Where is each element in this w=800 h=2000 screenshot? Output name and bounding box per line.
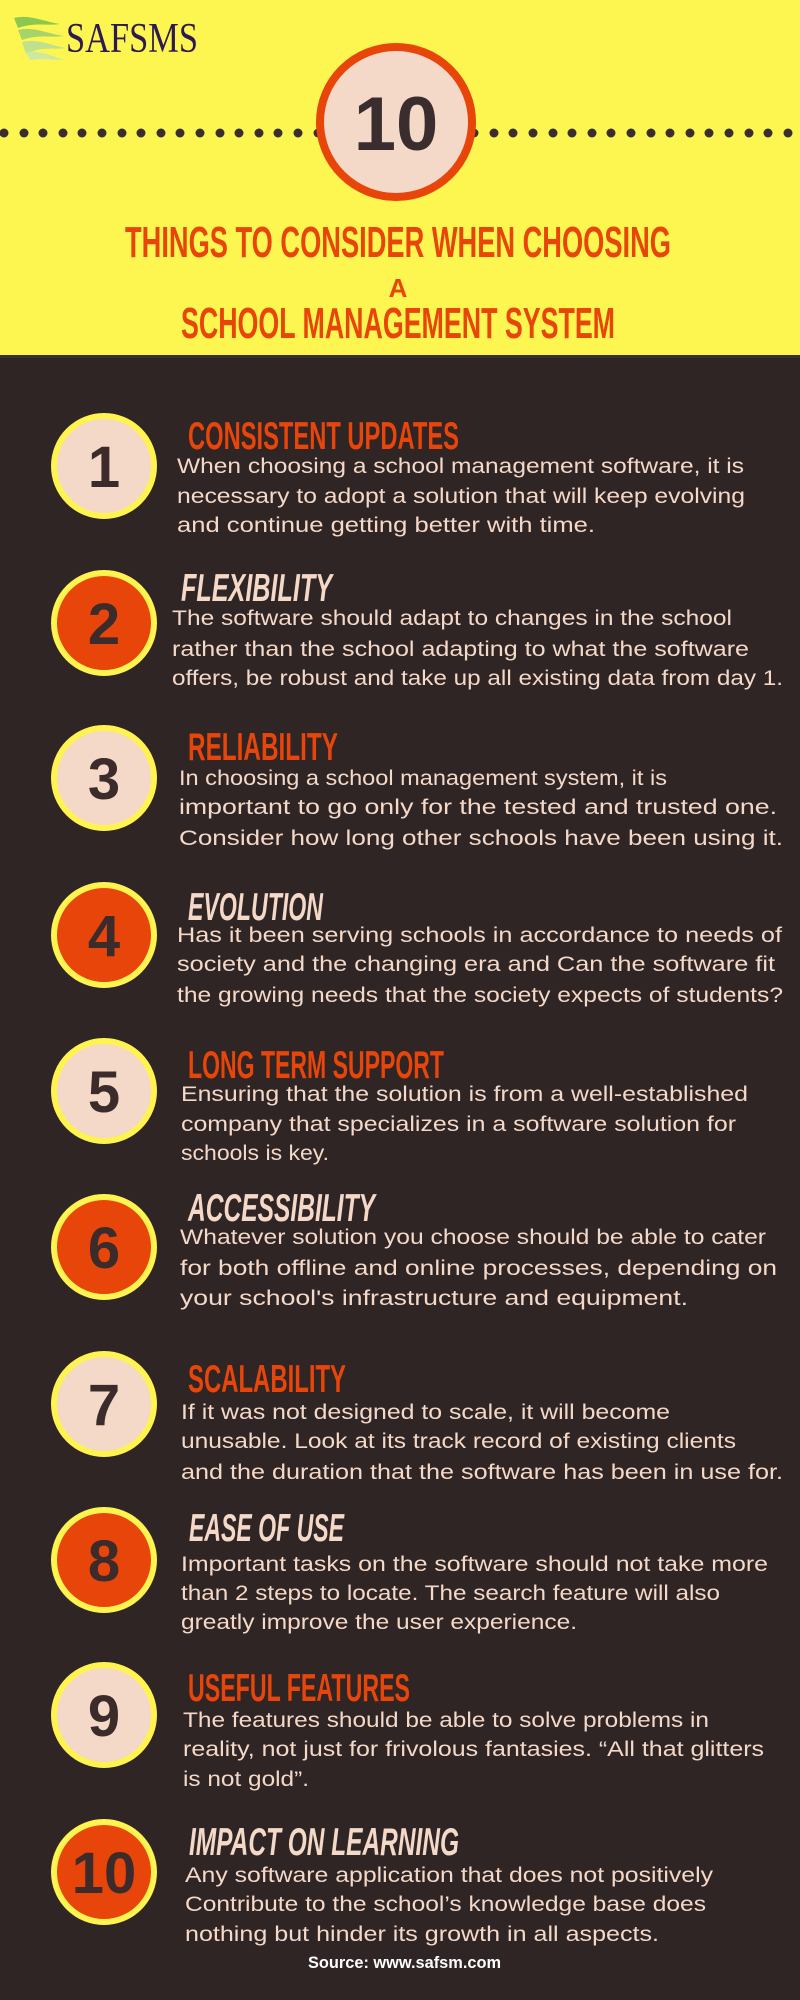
- big number badge: [320, 47, 472, 197]
- item 8: Important tasks on the software should not take more: [181, 1553, 768, 1576]
- item 3: [54, 726, 783, 850]
- item 10: Any software application that does not positively: [185, 1864, 714, 1887]
- item 9: reality, not just for frivolous fantasies. “All that glitters: [183, 1738, 764, 1761]
- item 6: ACCESSIBILITY: [187, 1187, 377, 1230]
- item 7: 7: [88, 1373, 120, 1438]
- item 1: CONSISTENT UPDATES: [188, 415, 459, 458]
- item 1: [54, 415, 745, 537]
- item 10: [54, 1821, 714, 1946]
- logo: SAFSMS: [66, 16, 198, 62]
- item 4: society and the changing era and Can the software fit: [177, 953, 775, 976]
- big number badge: 10: [354, 82, 438, 167]
- item 2: rather than the school adapting to what the software: [172, 638, 749, 661]
- item 5: LONG TERM SUPPORT: [188, 1044, 444, 1087]
- item 2: [54, 567, 783, 690]
- item 4: [54, 885, 783, 1007]
- title: A: [389, 273, 408, 303]
- item 4: Has it been serving schools in accordance to needs of: [177, 924, 782, 947]
- item 10: Contribute to the school’s knowledge base does: [185, 1893, 706, 1916]
- item 9: The features should be able to solve problems in: [183, 1709, 709, 1732]
- item 5: Ensuring that the solution is from a well-established: [181, 1083, 748, 1106]
- item 2: 2: [88, 592, 120, 657]
- item 10: IMPACT ON LEARNING: [189, 1821, 459, 1864]
- item 9: USEFUL FEATURES: [188, 1667, 410, 1710]
- item 5: [54, 1041, 748, 1165]
- item 9: [54, 1665, 764, 1791]
- item 9: 9: [88, 1684, 120, 1749]
- item 5: 5: [88, 1060, 120, 1125]
- item 10: nothing but hinder its growth in all aspects.: [185, 1923, 659, 1946]
- item 2: FLEXIBILITY: [181, 567, 334, 610]
- item 6: 6: [88, 1216, 120, 1281]
- logo: [14, 16, 198, 62]
- item 9: is not gold”.: [183, 1768, 309, 1791]
- item 1: 1: [88, 435, 120, 500]
- item 2: offers, be robust and take up all existing data from day 1.: [172, 667, 783, 690]
- item 7: SCALABILITY: [188, 1358, 346, 1401]
- item 3: In choosing a school management system, it is: [179, 767, 667, 790]
- item 6: Whatever solution you choose should be able to cater: [180, 1226, 766, 1249]
- item 6: your school's infrastructure and equipment.: [180, 1287, 688, 1310]
- item 8: greatly improve the user experience.: [181, 1611, 577, 1634]
- item 7: If it was not designed to scale, it will become: [181, 1401, 670, 1424]
- item 8: [54, 1507, 768, 1634]
- item 4: EVOLUTION: [188, 886, 323, 929]
- item 2: The software should adapt to changes in the school: [172, 607, 732, 630]
- item 7: and the duration that the software has been in use for.: [181, 1461, 783, 1484]
- source: Source: www.safsm.com: [308, 1953, 501, 1972]
- item 4: 4: [88, 904, 120, 969]
- item 1: necessary to adopt a solution that will keep evolving: [177, 485, 745, 508]
- item 3: important to go only for the tested and trusted one.: [179, 796, 777, 819]
- header panel: [0, 0, 800, 358]
- item 8: than 2 steps to locate. The search feature will also: [181, 1582, 720, 1605]
- item 3: RELIABILITY: [188, 726, 338, 769]
- title: [125, 218, 671, 348]
- item 4: the growing needs that the society expects of students?: [177, 984, 783, 1007]
- item 7: unusable. Look at its track record of existing clients: [181, 1430, 736, 1453]
- item 5: company that specializes in a software solution for: [181, 1113, 736, 1136]
- item 8: EASE OF USE: [189, 1507, 345, 1550]
- item 5: schools is key.: [181, 1142, 329, 1165]
- item 1: When choosing a school management software, it is: [177, 455, 744, 478]
- item 7: [54, 1354, 783, 1484]
- item 6: for both offline and online processes, depending on: [180, 1257, 777, 1280]
- item 10: 10: [72, 1841, 136, 1906]
- item 8: 8: [88, 1529, 120, 1594]
- item 6: [54, 1187, 777, 1310]
- item 1: and continue getting better with time.: [177, 514, 595, 537]
- item 3: 3: [88, 747, 120, 812]
- item 3: Consider how long other schools have been using it.: [179, 827, 783, 850]
